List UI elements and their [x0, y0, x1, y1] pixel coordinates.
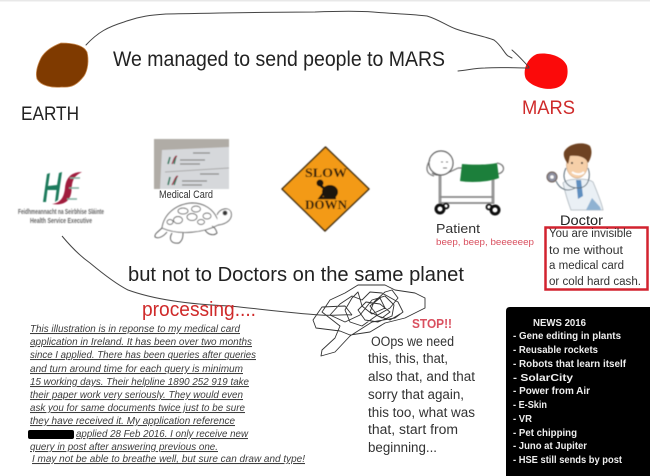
oops text: that, start from — [368, 422, 458, 437]
HSE logo: Health Service Executive — [30, 216, 92, 225]
processing label: processing.... — [142, 299, 256, 321]
medical card label: Medical Card — [159, 189, 213, 201]
panel: news 2016: NEWS 2016 — [533, 317, 586, 329]
explanation paragraph: This illustration is in reponse to my medical card — [30, 323, 241, 335]
explanation paragraph: their paper work very seriously. They would even — [30, 389, 243, 401]
panel: news 2016: - Pet chipping — [513, 427, 577, 439]
callout: invisible without a medical card — [546, 228, 648, 290]
icon: patient on stretcher — [427, 151, 504, 214]
sign: slow down: SLOW — [305, 166, 348, 180]
sign: slow down — [282, 147, 369, 231]
panel: news 2016 — [506, 307, 650, 476]
explanation paragraph: query in post after answering previous one. — [30, 441, 218, 453]
explanation paragraph: they have received it. My application reference — [30, 415, 235, 427]
oops text: sorry that again, — [368, 387, 464, 402]
medical card photo — [154, 139, 229, 189]
oops text — [368, 334, 475, 455]
explanation paragraph: 15 working days. Their helpline 1890 252 919 take — [30, 376, 249, 388]
icon: mars blob — [525, 54, 568, 89]
explanation paragraph: application in Ireland. It has been over two months — [30, 336, 253, 348]
callout: invisible without a medical card: You are invisible — [549, 228, 632, 240]
HSE logo — [18, 172, 104, 225]
explanation paragraph: I may not be able to breathe well, but sure can draw and type! — [32, 453, 305, 465]
panel: news 2016: - VR — [513, 413, 532, 425]
panel: news 2016: - Reusable rockets — [513, 344, 598, 356]
panel: news 2016: - SolarCity — [513, 372, 573, 384]
scribble — [313, 285, 425, 356]
patient label: Patient — [436, 222, 481, 236]
redaction bar — [28, 430, 74, 439]
panel: news 2016: - HSE still sends by post — [513, 454, 622, 466]
callout: invisible without a medical card: or cold hard cash. — [549, 276, 641, 288]
explanation paragraph — [30, 323, 305, 465]
doctor label: Doctor — [560, 213, 604, 228]
icon: earth blob — [36, 43, 88, 87]
icon: turtle — [155, 203, 231, 243]
stop label: STOP!! — [412, 316, 452, 331]
panel: news 2016: - Robots that learn itself — [513, 358, 626, 370]
icon: doctor — [547, 143, 603, 210]
mars label: MARS — [522, 98, 575, 119]
heading: mars: We managed to send people to MARS — [113, 48, 445, 71]
arrow: earth to mars arc — [86, 11, 529, 71]
panel: news 2016: - Power from Air — [513, 385, 590, 397]
patient sound: beep, beep, beeeeeep — [436, 237, 534, 248]
explanation paragraph: ask you for same documents twice just to be sure — [30, 402, 245, 414]
callout: invisible without a medical card: to me without — [549, 245, 624, 257]
oops text: OOps we need — [371, 334, 454, 349]
earth label: EARTH — [21, 103, 79, 125]
oops text: beginning... — [368, 440, 437, 455]
panel: news 2016: - E-Skin — [513, 399, 547, 411]
explanation paragraph: and turn around time for each query is minimum — [30, 363, 243, 375]
arrow: hse to scribble — [62, 236, 352, 315]
oops text: this too, what was — [368, 405, 475, 420]
panel: news 2016: - Gene editing in plants — [513, 330, 621, 342]
panel: news 2016: - Juno at Jupiter — [513, 440, 587, 452]
heading: doctors: but not to Doctors on the same planet — [128, 264, 464, 286]
HSE logo: Feidhmeannacht na Seirbhíse Sláinte — [18, 207, 104, 216]
oops text: also that, and that — [368, 369, 475, 384]
explanation paragraph: since I applied. There has been queries after queries — [30, 349, 257, 361]
sign: slow down: DOWN — [305, 198, 347, 212]
oops text: this, this, that, — [368, 351, 448, 366]
callout: invisible without a medical card: a medical card — [549, 260, 624, 272]
explanation paragraph: applied 28 Feb 2016. I only receive new — [76, 428, 249, 440]
